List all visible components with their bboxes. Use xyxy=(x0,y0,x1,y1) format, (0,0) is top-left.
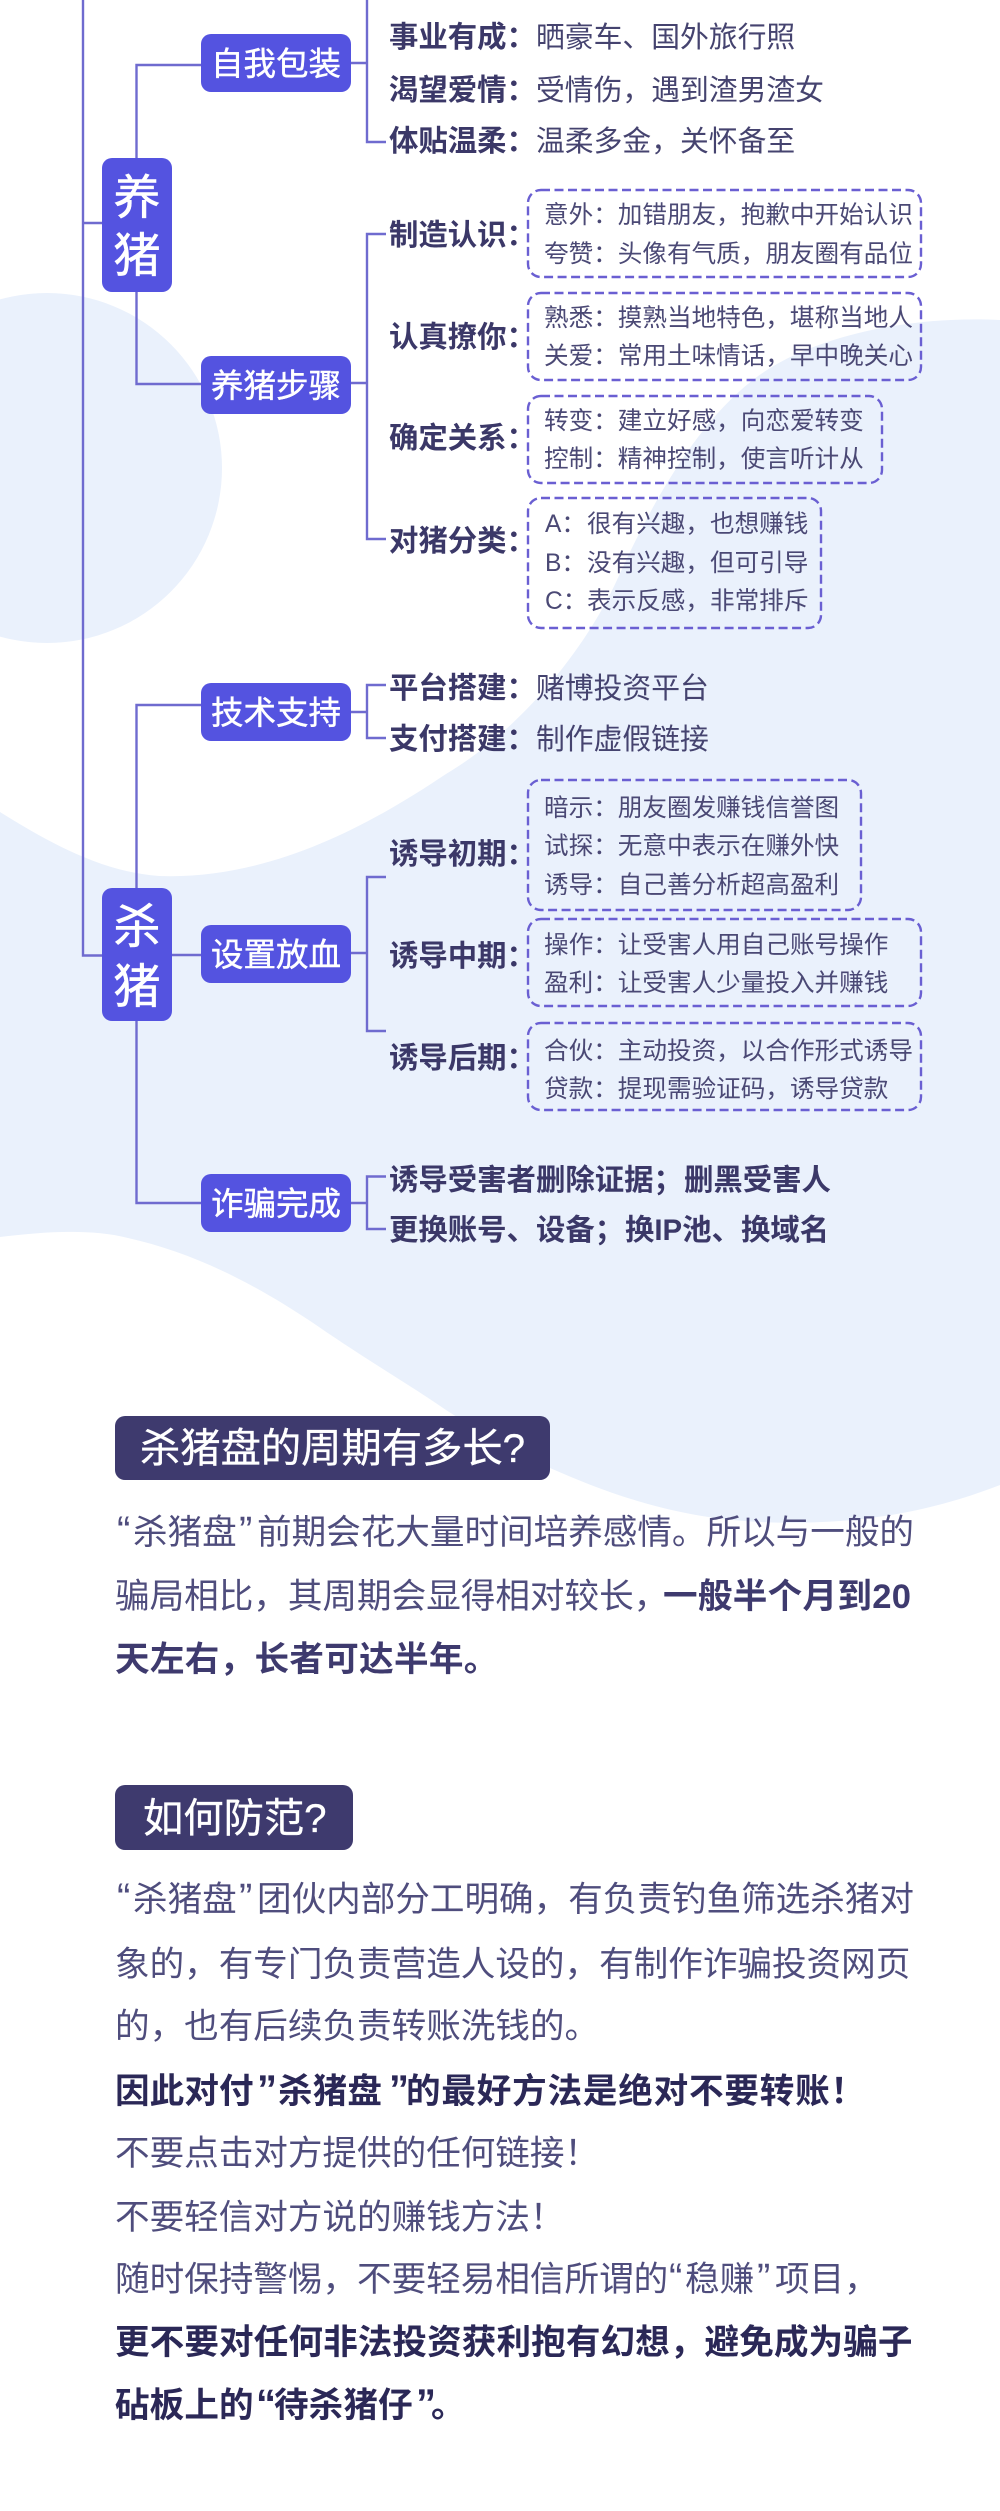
label: 确定关系: 确定关系： xyxy=(389,422,536,455)
node: 设置放血 xyxy=(201,925,351,983)
text row: 支付搭建: 支付搭建： xyxy=(389,723,536,756)
heading: 如何防范: 如何防范? xyxy=(143,1796,327,1841)
text block: 防范说明: 象的，有专门负责营造人设的，有制作诈骗投资网页 xyxy=(115,1946,910,1984)
dashed box: 制造认识: 意外：加错朋友，抱歉中开始认识 xyxy=(544,201,913,229)
dashed box: 认真撩你: 熟悉：摸熟当地特色，堪称当地人 xyxy=(544,304,913,332)
text block: 防范说明: “ xyxy=(256,2382,276,2426)
dashed box: 对猪分类: B： xyxy=(545,550,586,577)
text row: 体贴温柔: 温柔多金，关怀备至 xyxy=(536,126,795,158)
text block: 防范说明: 的最好方法是绝对不要转账！ xyxy=(406,2073,866,2111)
text block: 防范说明: 更不要对任何非法投资获利抱有幻想，避免成为骗子 xyxy=(115,2324,913,2362)
text block: 防范说明: 待杀猪仔 xyxy=(274,2387,413,2425)
text row: 渴望爱情: 渴望爱情： xyxy=(389,74,536,107)
label: 诱导后期: 诱导后期： xyxy=(389,1042,536,1075)
dashed box: 制造认识 xyxy=(528,190,921,277)
dashed box: 对猪分类: 表示反感，非常排斥 xyxy=(587,587,808,615)
node: 自我包装: 自我包装 xyxy=(211,46,341,82)
node: 技术支持: 技术支持 xyxy=(211,695,341,731)
dashed box: 确定关系 xyxy=(528,396,882,483)
dashed box: 诱导初期: 试探：无意中表示在赚外快 xyxy=(544,832,839,860)
text row: 更换账号: 换IP池、换域名 xyxy=(625,1214,829,1247)
text block: 防范说明: 砧板上的 xyxy=(115,2387,254,2425)
node: 养猪 xyxy=(102,158,172,292)
text block: 防范说明: 不要点击对方提供的任何链接！ xyxy=(115,2135,599,2173)
dashed box: 确定关系: 控制：精神控制，使言听计从 xyxy=(544,445,864,473)
text block: 防范说明: 因此对付 xyxy=(115,2073,254,2111)
dashed box: 对猪分类: 很有兴趣，也想赚钱 xyxy=(587,510,808,538)
dashed box: 对猪分类: A： xyxy=(545,511,586,538)
node: 技术支持 xyxy=(201,683,351,741)
node: 诈骗完成: 诈骗完成 xyxy=(211,1186,341,1222)
text block: 防范说明: 不要轻信对方说的赚钱方法！ xyxy=(115,2199,565,2237)
label: 诱导初期: 诱导初期： xyxy=(389,838,536,871)
node: 杀猪: 猪 xyxy=(114,960,160,1013)
text block: 防范说明: ” xyxy=(389,2068,409,2112)
text row: 支付搭建: 制作虚假链接 xyxy=(536,724,709,756)
heading: 周期: 杀猪盘的周期有多长? xyxy=(140,1426,525,1471)
node: 杀猪: 杀 xyxy=(114,900,160,953)
text block: 防范说明: 。 xyxy=(431,2387,466,2425)
heading: 周期 xyxy=(115,1416,550,1480)
text block: 防范说明: 杀猪盘 xyxy=(133,1881,237,1919)
dashed box: 确定关系: 转变：建立好感，向恋爱转变 xyxy=(544,407,864,435)
heading: 如何防范 xyxy=(115,1785,353,1850)
mind map connector lines xyxy=(83,0,386,1229)
dashed box: 诱导中期 xyxy=(528,919,921,1006)
text block: 防范说明: ” xyxy=(257,2068,277,2112)
dashed box: 认真撩你: 关爱：常用土味情话，早中晚关心 xyxy=(544,342,913,370)
text block: 防范说明 xyxy=(115,1876,914,2426)
node: 诈骗完成 xyxy=(201,1174,351,1232)
node: 养猪步骤 xyxy=(201,356,351,414)
dashed box: 诱导中期: 盈利：让受害人少量投入并赚钱 xyxy=(544,969,888,997)
text block: 防范说明: 杀猪盘 xyxy=(278,2073,382,2111)
text block: 防范说明: 随时保持警惕，不要轻易相信所谓的 xyxy=(115,2261,668,2299)
label: 认真撩你: 认真撩你： xyxy=(389,321,536,354)
label: 诱导中期: 诱导中期： xyxy=(389,940,536,973)
text block: 防范说明: 项目， xyxy=(775,2261,879,2299)
text block: 周期说明: 一般半个月到20 xyxy=(663,1578,911,1616)
text row: 事业有成: 事业有成： xyxy=(389,21,536,54)
text block: 防范说明: 的，也有后续负责转账洗钱的。 xyxy=(115,2008,599,2046)
text row: 渴望爱情: 受情伤，遇到渣男渣女 xyxy=(536,75,824,107)
node: 自我包装 xyxy=(201,34,351,92)
text block: 周期说明: 杀猪盘 xyxy=(133,1514,237,1552)
dashed box: 诱导中期: 操作：让受害人用自己账号操作 xyxy=(544,931,888,959)
dashed box: 诱导初期 xyxy=(528,780,861,910)
text block: 周期说明: ” xyxy=(239,1509,252,1553)
text row: 平台搭建: 赌博投资平台 xyxy=(536,673,709,705)
text row: 删除证据: 删黑受害人 xyxy=(684,1164,831,1197)
text row: 体贴温柔: 体贴温柔： xyxy=(389,125,536,158)
text block: 防范说明: “ xyxy=(669,2256,682,2300)
dashed box: 诱导初期: 诱导：自己善分析超高盈利 xyxy=(544,871,839,899)
text block: 防范说明: ” xyxy=(239,1876,252,1920)
node: 养猪: 猪 xyxy=(114,229,160,282)
dashed box: 诱导后期 xyxy=(528,1023,921,1110)
dashed box: 对猪分类: 没有兴趣，但可引导 xyxy=(587,549,808,577)
dashed box: 诱导初期: 暗示：朋友圈发赚钱信誉图 xyxy=(544,794,839,822)
text block: 周期说明: “ xyxy=(117,1509,130,1553)
background: left circle xyxy=(0,293,222,643)
node: 养猪: 养 xyxy=(114,171,160,224)
text block: 防范说明: 稳赚 xyxy=(685,2261,754,2299)
text block: 周期说明: 天左右，长者可达半年。 xyxy=(115,1641,499,1679)
text row: 删除证据: 诱导受害者删除证据； xyxy=(389,1164,683,1197)
text block: 周期说明: 骗局相比，其周期会显得相对较长， xyxy=(115,1578,668,1616)
text row: 事业有成: 晒豪车、国外旅行照 xyxy=(536,22,795,54)
dashed box: 诱导后期: 合伙：主动投资，以合作形式诱导 xyxy=(544,1037,913,1065)
text block: 防范说明: “ xyxy=(117,1876,130,1920)
node: 养猪步骤: 养猪步骤 xyxy=(211,368,341,404)
text row: 更换账号: 更换账号、设备； xyxy=(389,1214,624,1247)
label: 对猪分类: 对猪分类： xyxy=(389,525,536,558)
node: 设置放血: 设置放血 xyxy=(211,937,341,973)
dashed box: 对猪分类: C： xyxy=(545,588,587,615)
label: 制造认识: 制造认识： xyxy=(389,219,536,252)
text block: 防范说明: ” xyxy=(757,2256,770,2300)
text block: 周期说明 xyxy=(115,1509,914,1679)
dashed box: 认真撩你 xyxy=(528,293,921,380)
node: 杀猪 xyxy=(102,888,172,1021)
background: large wave blob xyxy=(0,319,1000,1523)
dashed box: 制造认识: 夸赞：头像有气质，朋友圈有品位 xyxy=(544,240,913,268)
text row: 平台搭建: 平台搭建： xyxy=(389,671,536,705)
dashed box: 对猪分类 xyxy=(528,498,821,628)
dashed box: 诱导后期: 贷款：提现需验证码，诱导贷款 xyxy=(544,1075,888,1103)
text block: 防范说明: ” xyxy=(416,2382,436,2426)
text block: 周期说明: 前期会花大量时间培养感情。所以与一般的 xyxy=(257,1514,914,1552)
text block: 防范说明: 团伙内部分工明确，有负责钓鱼筛选杀猪对 xyxy=(257,1881,914,1919)
